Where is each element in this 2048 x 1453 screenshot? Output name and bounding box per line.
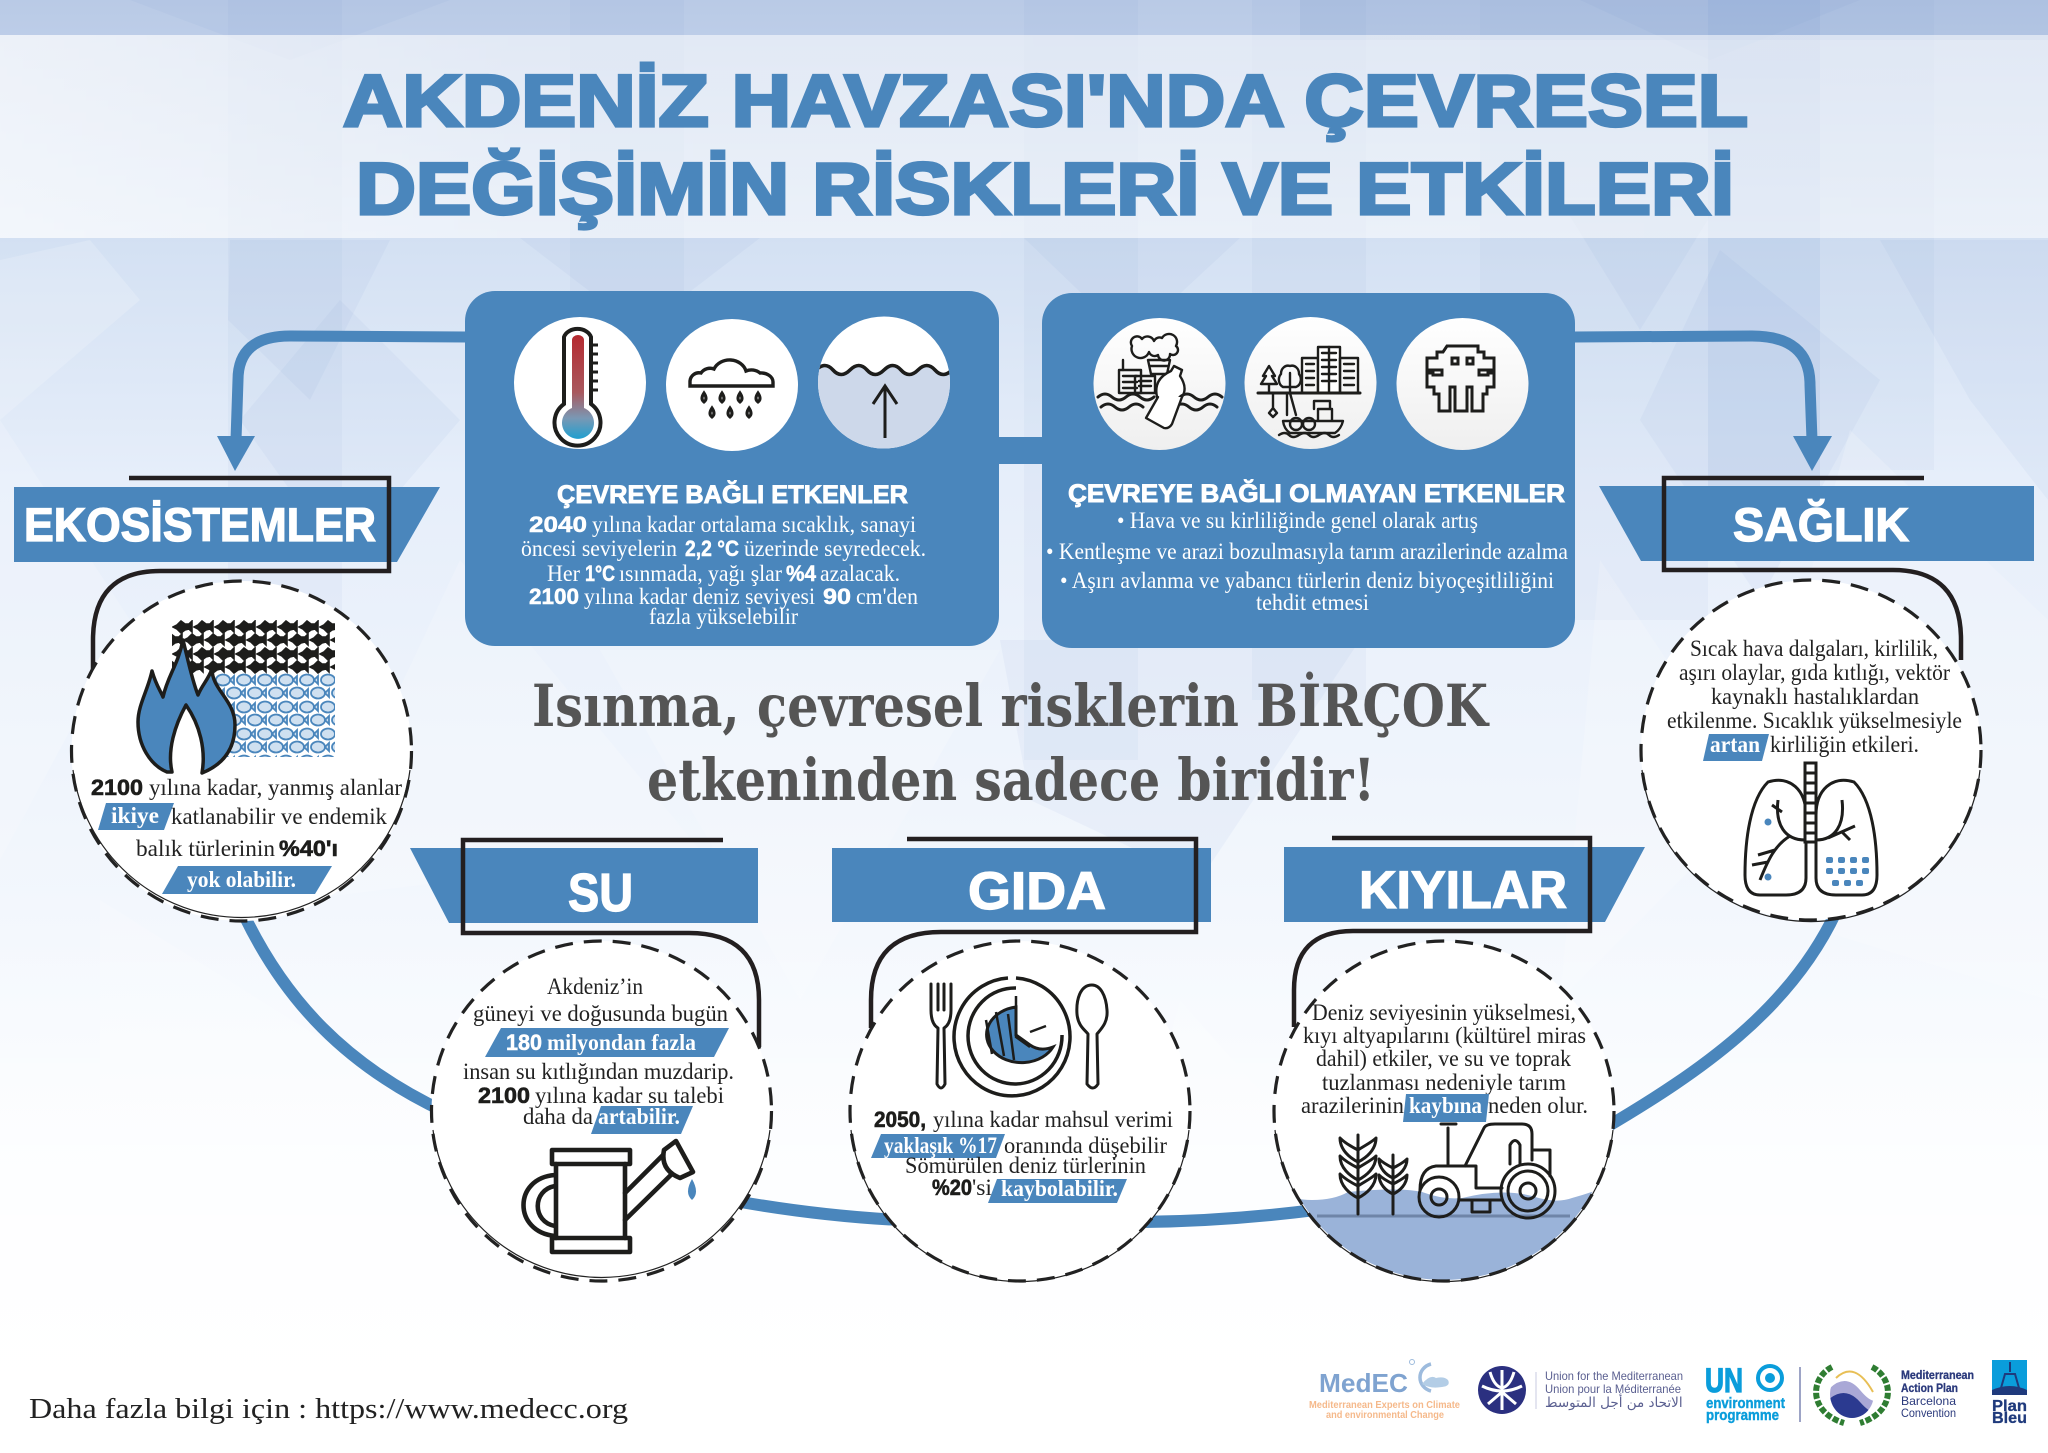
text block: %40'ı xyxy=(279,836,338,861)
dashed circle xyxy=(432,941,772,1281)
text block: yılına kadar ortalama sıcaklık, sanayi xyxy=(592,512,916,537)
icon: rain cloud xyxy=(666,319,798,451)
frame line xyxy=(1664,478,1961,660)
text block: katlanabilir ve endemik xyxy=(171,804,387,829)
frame line xyxy=(463,840,759,1047)
text block xyxy=(1301,1000,1588,1122)
logo: Mediterranean Action Plan: Convention xyxy=(1901,1406,1956,1420)
text block: 'si xyxy=(972,1175,992,1200)
logo: MedECC: and environmental Change xyxy=(1326,1410,1444,1421)
text block: daha da xyxy=(523,1104,593,1129)
arrow: right panel to saglik xyxy=(1574,336,1832,471)
text block: kıyı altyapılarını (kültürel miras xyxy=(1303,1023,1586,1048)
logo: Plan Bleu: Bleu xyxy=(1992,1410,2027,1427)
text block: güneyi ve doğusunda bugün xyxy=(473,1001,728,1026)
section: gida xyxy=(832,839,1211,1282)
text block: yılına kadar su talebi xyxy=(535,1083,724,1108)
banner xyxy=(410,848,758,923)
text block xyxy=(871,1107,1173,1203)
logo: UN environment programme: programme xyxy=(1706,1407,1779,1424)
section: ekosistemler xyxy=(14,478,440,921)
text block: ısınmada, yağı şlar xyxy=(619,561,782,586)
text block: %20 xyxy=(932,1175,972,1200)
logo: Plan Bleu: Plan xyxy=(1992,1398,2027,1415)
text block: üzerinde seyredecek. xyxy=(744,536,926,561)
text block: dahil) etkiler, ve su ve toprak xyxy=(1316,1046,1571,1071)
logo: Mediterranean Action Plan: Action Plan xyxy=(1901,1383,1958,1395)
text block: 2100 xyxy=(91,775,143,800)
text block: tuzlanması nedeniyle tarım xyxy=(1322,1070,1566,1095)
frame line xyxy=(93,478,389,672)
text block xyxy=(463,974,734,1134)
text block: etkilenme. Sıcaklık yükselmesiyle xyxy=(1667,708,1962,733)
icon: plate with fork and spoon xyxy=(931,978,1107,1096)
text block: insan su kıtlığından muzdarip. xyxy=(463,1059,734,1084)
header band xyxy=(0,35,2048,238)
logo: Union for the Mediterranean xyxy=(1478,1366,1683,1414)
heading: EKOSİSTEMLER xyxy=(24,498,376,551)
text block: yılına kadar deniz seviyesi xyxy=(584,584,815,609)
text block: oranında düşebilir xyxy=(1004,1133,1167,1158)
logo: Union for the Mediterranean: الاتحاد من أجل المتوسط xyxy=(1545,1393,1683,1411)
central message: Isınma, çevresel risklerin BİRÇOK xyxy=(532,671,1490,740)
text block: azalacak. xyxy=(820,561,900,586)
icon: crops and tractor xyxy=(1317,1124,1570,1218)
banner xyxy=(14,487,440,562)
logo: Plan Bleu xyxy=(1992,1360,2027,1427)
dashed circle xyxy=(850,941,1190,1282)
text block: %4 xyxy=(786,561,817,586)
text block: yaklaşık %17 xyxy=(884,1133,997,1158)
divider xyxy=(1799,1367,1801,1422)
connecting ring curves xyxy=(244,912,1836,1222)
panel: climate drivers xyxy=(465,291,999,646)
text block: 2100 xyxy=(529,584,579,609)
text block: balık türlerinin xyxy=(136,836,276,861)
text block: tehdit etmesi xyxy=(1256,590,1369,615)
text block: öncesi seviyelerin xyxy=(521,536,677,561)
text block: Her xyxy=(547,561,580,586)
icon: urbanization xyxy=(1244,317,1376,449)
text block: kaynaklı hastalıklardan xyxy=(1711,684,1919,709)
text block: ikiye xyxy=(111,803,159,828)
text block: cm'den xyxy=(856,584,918,609)
icon: invasive species xyxy=(1396,318,1528,450)
text block xyxy=(521,512,926,629)
heading: SU xyxy=(568,863,633,923)
logo: MedECC: Mediterranean Experts on Climate xyxy=(1309,1400,1460,1411)
logo: Union for the Mediterranean: Union for the Mediterranean xyxy=(1545,1369,1683,1383)
heading: KIYILAR xyxy=(1359,861,1567,920)
icon: sea level rise xyxy=(816,316,952,450)
text block: aşırı olaylar, gıda kıtlığı, vektör xyxy=(1679,660,1950,685)
banner xyxy=(832,848,1211,922)
panel: non-climate drivers xyxy=(1042,293,1575,648)
icon: flame xyxy=(138,640,235,773)
text block: kaybına xyxy=(1409,1093,1482,1118)
heading: ÇEVREYE BAĞLI OLMAYAN ETKENLER xyxy=(1068,479,1565,508)
text block: yılına kadar, yanmış alanlar xyxy=(149,775,402,800)
heading: GIDA xyxy=(968,862,1106,921)
text block: • Hava ve su kirliliğinde genel olarak artış xyxy=(1117,508,1478,533)
central message: etkeninden sadece biridir! xyxy=(647,746,1375,814)
text block: fazla yükselebilir xyxy=(649,604,798,629)
text block xyxy=(91,775,402,894)
text block: Akdeniz’in xyxy=(547,974,643,999)
icon: watering can xyxy=(524,1141,696,1252)
text block: • Kentleşme ve arazi bozulmasıyla tarım arazilerinde azalma xyxy=(1046,539,1568,564)
text block: 2040 xyxy=(529,512,587,537)
icon: lungs xyxy=(1745,763,1877,895)
icon: pollution xyxy=(1094,318,1226,450)
text block: Sömürülen deniz türlerinin xyxy=(905,1153,1146,1178)
dashed circle xyxy=(1641,580,1981,922)
heading: ÇEVREYE BAĞLI ETKENLER xyxy=(557,480,908,509)
text block: kirliliğin etkileri. xyxy=(1770,732,1919,757)
central message xyxy=(532,671,1490,814)
arrow: left panel to ekosistemler xyxy=(217,336,466,471)
text block: 2100 xyxy=(478,1083,530,1108)
text block: 180 xyxy=(506,1030,542,1055)
logo: MedECC: MedEC xyxy=(1319,1368,1408,1398)
fish pattern xyxy=(172,620,335,757)
logo: UN environment programme xyxy=(1705,1362,1785,1424)
logo: Mediterranean Action Plan: Barcelona xyxy=(1901,1394,1956,1408)
title: DEĞİŞİMİN RİSKLERİ VE ETKİLERİ xyxy=(356,149,1734,230)
banner xyxy=(1284,847,1645,922)
logo: Mediterranean Action Plan xyxy=(1816,1367,1974,1423)
text block: kaybolabilir. xyxy=(1001,1176,1118,1201)
text block xyxy=(1667,636,1962,761)
text block: artabilir. xyxy=(598,1104,680,1129)
text block: milyondan fazla xyxy=(547,1030,696,1055)
section: su xyxy=(410,840,772,1281)
heading: SAĞLIK xyxy=(1733,498,1909,551)
section: saglik xyxy=(1599,478,2034,922)
icon: thermometer xyxy=(514,317,646,449)
text block: 90 xyxy=(823,584,851,609)
logo: Mediterranean Action Plan: Mediterranean xyxy=(1901,1370,1974,1382)
logo: UN environment programme: UN xyxy=(1705,1362,1743,1400)
dashed circle with water xyxy=(1270,941,1614,1290)
footer link text: Daha fazla bilgi için : https://www.medecc.org xyxy=(29,1394,628,1425)
frame line xyxy=(1294,838,1590,1027)
frame line xyxy=(871,839,1196,1028)
text block: arazilerinin xyxy=(1301,1093,1404,1118)
text block: 2,2 °C xyxy=(685,536,739,561)
text block: yılına kadar mahsul verimi xyxy=(933,1107,1173,1132)
connector between panels xyxy=(995,437,1047,464)
text block: Sıcak hava dalgaları, kirlilik, xyxy=(1690,636,1938,661)
text block: yok olabilir. xyxy=(187,867,296,892)
dashed circle xyxy=(72,581,412,921)
text block: artan xyxy=(1710,732,1760,757)
text block xyxy=(1046,508,1568,615)
title: AKDENİZ HAVZASI'NDA ÇEVRESEL xyxy=(343,61,1748,142)
text block: 2050, xyxy=(874,1107,926,1132)
logo: Union for the Mediterranean: Union pour la Méditerranée xyxy=(1545,1382,1681,1396)
logo: MedECC xyxy=(1308,1358,1461,1421)
text block: • Aşırı avlanma ve yabancı türlerin deniz biyoçeşitliliğini xyxy=(1060,568,1554,593)
text block: 1°C xyxy=(585,561,615,586)
banner xyxy=(1599,486,2034,561)
text block: neden olur. xyxy=(1488,1093,1588,1118)
title xyxy=(343,61,1748,230)
section: kiyilar xyxy=(1270,838,1645,1290)
logo: UN environment programme: environment xyxy=(1706,1395,1785,1412)
text block: Deniz seviyesinin yükselmesi, xyxy=(1312,1000,1576,1025)
